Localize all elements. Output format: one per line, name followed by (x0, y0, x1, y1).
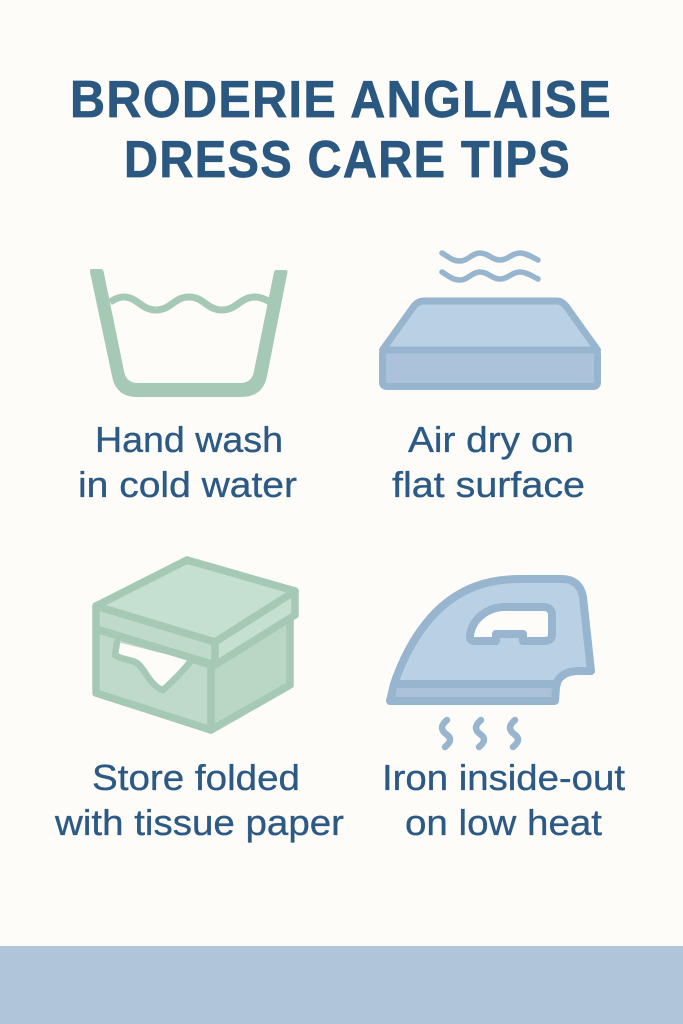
label: hand wash: Hand wash (95, 419, 283, 460)
label: iron: on low heat (405, 802, 602, 843)
label: store folded (54, 757, 344, 843)
label: air dry (392, 419, 585, 505)
panel: air dry (382, 253, 598, 505)
label: iron: Iron inside-out (382, 757, 625, 798)
panel: store folded (54, 560, 344, 843)
title (70, 71, 612, 189)
panel: hand wash (78, 269, 297, 505)
icon: wash basin (90, 269, 288, 397)
label: hand wash (78, 419, 297, 505)
label: store folded: with tissue paper (54, 802, 344, 843)
title: DRESS CARE TIPS (124, 131, 571, 189)
footer band (0, 946, 683, 1024)
icon: iron with steam (390, 579, 591, 747)
label: store folded: Store folded (92, 757, 300, 798)
label: air dry: Air dry on (408, 419, 574, 460)
label: air dry: flat surface (392, 464, 585, 505)
title: BRODERIE ANGLAISE (70, 71, 612, 129)
panel: iron (382, 579, 625, 843)
label: hand wash: in cold water (78, 464, 297, 505)
icon: storage box with tissue (96, 560, 295, 730)
label: iron (382, 757, 625, 843)
icon: air waves and flat surface (382, 253, 598, 386)
